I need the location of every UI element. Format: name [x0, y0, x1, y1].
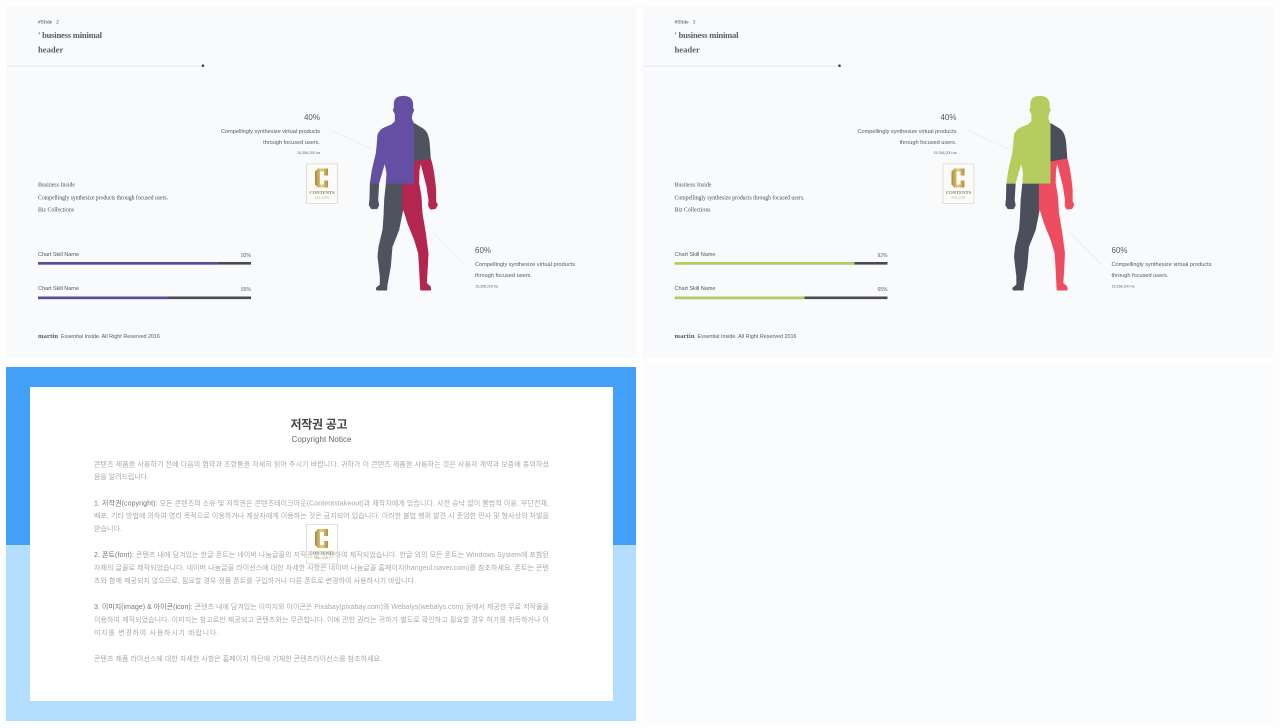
panel: empty slide background: [643, 362, 1273, 722]
text block: business inside: Compellingly synthesize products through focused users.: [38, 194, 169, 202]
callout: 60%: through focused users.: [475, 273, 532, 279]
bar chart: skill 1: [38, 252, 252, 265]
light blue band: [6, 545, 636, 721]
footer: Essential Inside. All Right Reserved 2016: [61, 334, 160, 340]
bar chart: skill 2: [674, 286, 888, 299]
callout: 60%: through focused users.: [1112, 273, 1169, 279]
white card: [30, 387, 613, 701]
logo badge: slide 2: CONTENTS: [309, 190, 335, 195]
panel: slide 2 background: [6, 6, 636, 358]
notice subtitle: Copyright Notice: [292, 435, 352, 444]
callout: 60%: [433, 232, 575, 288]
human figure: [1005, 96, 1074, 290]
notice intro: 음을 알려드립니다.: [94, 472, 149, 481]
text block: business inside: Business Inside: [674, 182, 712, 188]
notice section 1: [94, 498, 550, 533]
logo badge: slide 3: CONTENTS: [946, 190, 972, 195]
callout: 60%: [1070, 232, 1212, 288]
bar chart: skill 2: Chart Skill Name: [674, 286, 716, 292]
logo badge: slide 3: [943, 164, 974, 203]
callout: 40%: Compellingly synthesize virtual products: [221, 129, 320, 135]
bar chart: skill 1: 92%: [241, 253, 252, 259]
callout: 60%: 15,358,200 ha: [1112, 284, 1134, 288]
footer: martin: [674, 333, 695, 340]
callout: 40%: 40%: [304, 113, 320, 122]
callout: 40%: [858, 113, 1008, 155]
notice section 1: 배포, 기타 방법에 의하여 영리 목적으로 이용하거나 제삼자에게 이용하는 것은 금지되어 있습니다. 이러한 불법 행위 발견 시 준엄한 민사 및 형사상의 처벌을: [94, 511, 550, 520]
notice section 2: 자체의 글꼴로 제작되었습니다. 네이버 나눔글꼴 라이선스에 대한 자세한 사항은 네이버 나눔글꼴 홈페이지(hangeul.naver.com)를 참조하세요. 폰트는 콘텐: [94, 563, 549, 572]
callout: 60%: 15,358,200 ha: [475, 284, 498, 288]
bar chart: skill 2: 65%: [877, 287, 888, 293]
notice section 2: 츠와 함께 제공되지 않으므로, 필요할 경우 정품 폰트를 구입하거나 다른 폰트로 변경하여 사용하시기 바랍니다.: [94, 576, 416, 585]
bar chart: skill 1: Chart Skill Name: [38, 252, 79, 258]
callout: 60%: 60%: [1112, 246, 1128, 255]
footer: Essential Inside. All Right Reserved 2016: [698, 334, 796, 340]
text block: business inside: [674, 182, 805, 214]
bar chart: skill 1: 92%: [877, 253, 888, 259]
slide 2 header: ' business minimal: [38, 30, 103, 40]
logo badge: slide 2: [306, 164, 337, 203]
bar chart: skill 2: 65%: [241, 287, 252, 293]
notice closing line: 콘텐츠 제품 라이선스에 대한 자세한 사항은 홈페이지 하단에 기재한 콘텐츠라이선스를 참조하세요.: [94, 654, 382, 663]
footer: martin: [38, 333, 58, 340]
human figure: [368, 96, 438, 290]
logo badge: slide 2: REAL CORE: [315, 196, 329, 200]
panel: slide 3 content: [644, 20, 1212, 340]
notice section 3: 미지를 변경하여 사용하시기 바랍니다.: [94, 628, 219, 637]
callout: 40%: through focused users.: [263, 140, 320, 146]
panel: copyright notice: [6, 367, 636, 721]
panel: slide 2 content: [7, 20, 575, 340]
notice section 2: [94, 550, 549, 585]
text block: business inside: [38, 182, 169, 214]
blue band: [6, 367, 636, 545]
footer: [38, 333, 160, 340]
notice section 3: 3. 이미지(image) & 아이콘(icon): 콘텐츠 내에 담겨있는 이미지와 아이콘은 Pixabay(pixabay.com)와 Webalys(webalys.com) 등에서 제공한 무료 저작물을: [94, 602, 550, 611]
notice section 1: 1. 저작권(copyright): 모든 콘텐츠의 소유 및 저작권은 콘텐츠테이크아웃(Contentstakeout)과 제작자에게 있습니다. 사전 승낙 없이 불법적 이용, 무단전재,: [94, 498, 549, 508]
notice title: 저작권 공고: [290, 416, 348, 432]
notice section 3: [94, 602, 550, 637]
slide 3 header: [644, 20, 841, 67]
bar chart: skill 2: Chart Skill Name: [38, 286, 79, 292]
text block: business inside: Biz Collections: [674, 208, 711, 214]
callout: 40%: [221, 113, 372, 155]
logo badge: notice: CONTENTS: [309, 550, 335, 556]
notice intro: 콘텐츠 제품을 사용하기 전에 다음의 협약과 조항들을 자세히 읽어 주시기 바랍니다. 귀하가 이 콘텐츠 제품을 사용하는 것은 사용자 계약과 보증에 동의하셨: [94, 460, 550, 468]
notice section 3: 이용하여 제작되었습니다. 이미지는 참고로만 제공되고 콘텐츠와는 무관합니다. 이에 관한 권리는 귀하가 별도로 확인하고 필요할 경우 허가를 취득하거나 이: [94, 615, 549, 624]
footer: [674, 333, 796, 340]
slide 2 header: [7, 20, 204, 67]
text block: business inside: Biz Collections: [38, 208, 75, 214]
bar chart: skill 2: [38, 286, 252, 299]
slide 3 header: header: [674, 44, 700, 54]
notice section 2: 2. 폰트(font): 콘텐츠 내에 담겨있는 한글 폰트는 네이버 나눔글꼴의 저작권을 이용하여 제작되었습니다. 한글 외의 모든 폰트는 Windows System에 포함된: [94, 550, 549, 559]
logo badge: slide 3: REAL CORE: [952, 196, 966, 200]
callout: 60%: Compellingly synthesize virtual products: [475, 262, 575, 268]
notice section 1: 받습니다.: [94, 524, 122, 533]
logo badge: notice: REAL CORE: [315, 557, 329, 560]
slide 2 header: #Slide 2: [38, 20, 59, 26]
bar chart: skill 1: [674, 252, 888, 265]
slide 3 header: ' business minimal: [674, 30, 739, 40]
bar chart: skill 1: Chart Skill Name: [674, 252, 716, 258]
notice intro: [94, 460, 550, 481]
callout: 60%: 60%: [475, 246, 491, 255]
callout: 40%: 15,358,200 ha: [297, 151, 320, 155]
callout: 40%: through focused users.: [900, 140, 957, 146]
callout: 40%: 15,358,200 ha: [934, 151, 956, 155]
logo badge: notice: [306, 524, 337, 564]
text block: business inside: Business Inside: [38, 182, 75, 188]
text block: business inside: Compellingly synthesize products through focused users.: [674, 194, 805, 202]
slide 2 header: header: [38, 44, 63, 54]
callout: 40%: Compellingly synthesize virtual products: [858, 129, 957, 135]
callout: 40%: 40%: [940, 113, 956, 122]
slide 3 header: #Slide 3: [674, 20, 696, 26]
panel: slide 3 background: [643, 6, 1273, 358]
callout: 60%: Compellingly synthesize virtual products: [1112, 262, 1212, 268]
